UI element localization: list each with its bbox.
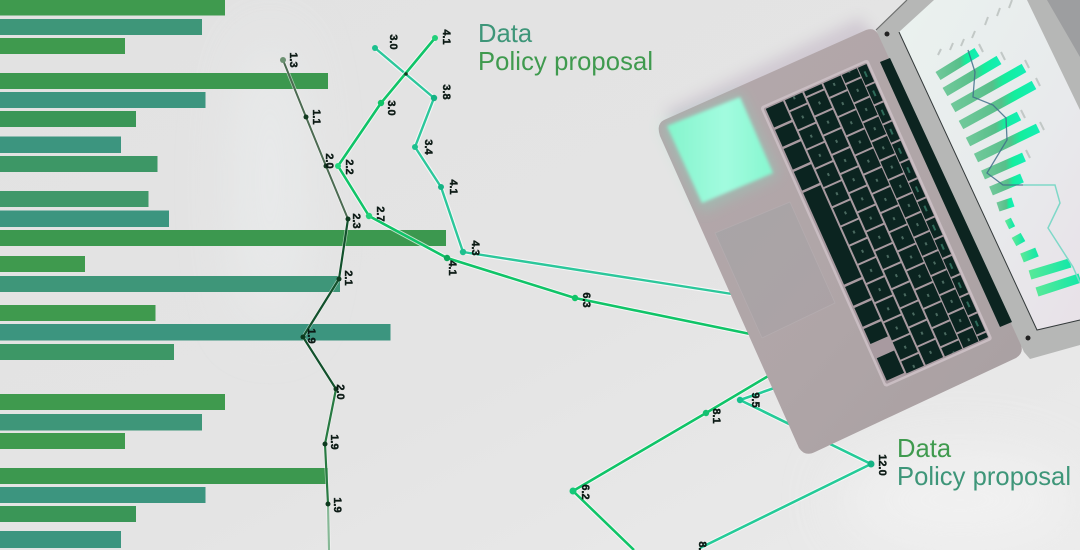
- legend: bottom: Policy proposal: [897, 463, 1071, 491]
- data point labels: 1.9: [331, 497, 343, 513]
- screen axis ticks: [938, 0, 1044, 158]
- laptop lid: [876, 0, 1080, 359]
- data point labels: 2.2: [343, 159, 355, 175]
- laptop base: [659, 29, 1022, 454]
- data point labels: 2.1: [342, 270, 354, 286]
- laptop photo: [659, 0, 1080, 454]
- legend: top: Policy proposal: [478, 48, 653, 76]
- data point labels: 4.1: [440, 29, 452, 45]
- line series: teal lower: [700, 386, 874, 548]
- data point labels: 4.1: [446, 260, 458, 276]
- data point labels: 2.7: [374, 206, 386, 222]
- data point labels: 2.3: [350, 213, 362, 229]
- data point labels: 6.2: [579, 484, 591, 500]
- data point labels: 2.0: [334, 384, 346, 400]
- line series: teal upper: [372, 45, 745, 296]
- data point labels: 3.0: [387, 34, 399, 50]
- laptop shadow: [664, 18, 895, 150]
- data point labels: 4.3: [469, 240, 481, 256]
- legend: bottom: Data: [897, 435, 952, 463]
- data point labels: 9.5: [749, 392, 761, 408]
- line series: green upper: [335, 35, 760, 336]
- legend: top: Data: [478, 20, 533, 48]
- mint glow: [660, 92, 778, 212]
- line series: dark green: [280, 57, 350, 550]
- data point labels: 1.3: [287, 52, 299, 68]
- data point labels: 12.0: [876, 454, 888, 476]
- screen display: [899, 0, 1080, 330]
- legend: top: [478, 20, 653, 76]
- data point labels: 3.4: [422, 139, 434, 156]
- data point labels: 3.0: [385, 100, 397, 116]
- data point labels: 1.9: [305, 328, 317, 344]
- line series: green lower: [570, 372, 775, 550]
- screen bar chart: [938, 52, 1080, 292]
- data point labels: [287, 29, 888, 550]
- data point labels: 2.0: [323, 153, 335, 169]
- data point labels: 8.1: [710, 408, 722, 424]
- bar chart: [0, 0, 446, 548]
- data point labels: 6.3: [580, 292, 592, 308]
- legend: bottom: [897, 435, 1071, 491]
- hinge strip: [880, 58, 1012, 327]
- mint note: [667, 97, 773, 203]
- data point labels: 1.9: [328, 434, 340, 450]
- data point labels: 1.1: [310, 109, 322, 125]
- screen line chart: [968, 50, 1080, 283]
- data point labels: 4.1: [447, 179, 459, 195]
- trackpad: [715, 202, 835, 338]
- data point labels: 3.8: [440, 84, 452, 100]
- keyboard: [760, 59, 993, 387]
